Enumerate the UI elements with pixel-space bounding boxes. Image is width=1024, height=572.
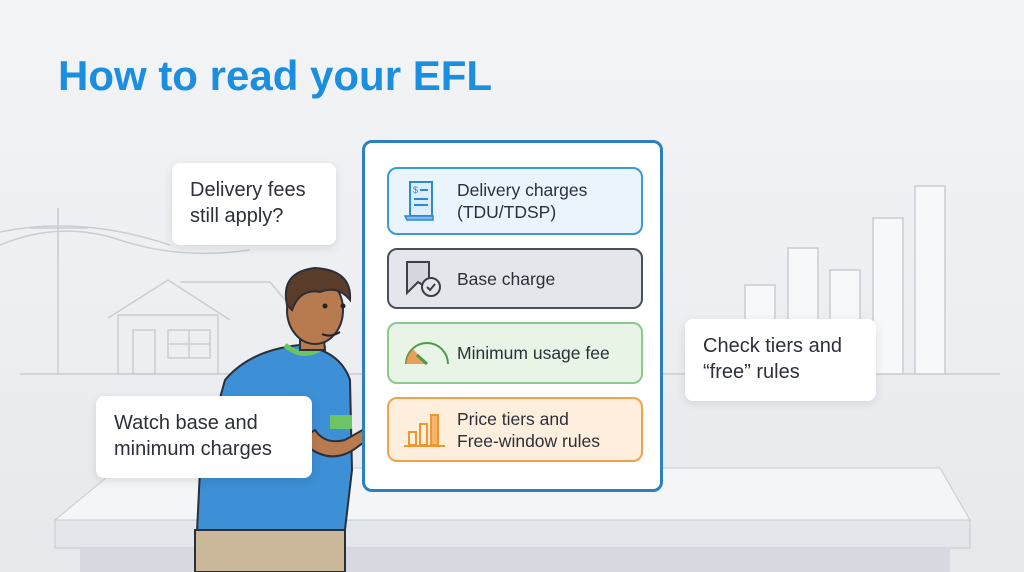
callout: delivery fees: still apply? <box>190 205 283 227</box>
row: delivery charges: Delivery charges <box>457 180 587 200</box>
icon: bill: $ <box>413 185 418 195</box>
callout: watch base <box>96 396 312 478</box>
row: minimum usage fee <box>387 322 643 384</box>
row: base charge: Base charge <box>457 268 555 288</box>
row: delivery charges <box>387 167 643 235</box>
callout: check tiers: Check tiers and <box>703 335 842 357</box>
callout: watch base: Watch base and <box>114 412 258 434</box>
row: delivery charges: (TDU/TDSP) <box>457 202 556 222</box>
row: price tiers: Price tiers and <box>457 408 569 428</box>
row: base charge <box>387 248 643 309</box>
row: minimum usage fee: Minimum usage fee <box>457 343 610 363</box>
callout: delivery fees <box>172 163 336 245</box>
person illustration <box>194 267 362 572</box>
title: How to read your EFL <box>58 52 492 99</box>
row: price tiers <box>387 397 643 462</box>
callout: delivery fees: Delivery fees <box>190 179 306 201</box>
row: price tiers: Free-window rules <box>457 430 600 450</box>
icon: bill <box>404 181 434 221</box>
table <box>55 468 970 520</box>
icon: bar chart <box>404 414 445 447</box>
callout: check tiers <box>685 319 876 401</box>
icon: gauge <box>405 342 449 365</box>
callout: watch base: minimum charges <box>114 438 272 460</box>
icon: tag check <box>406 261 441 297</box>
callout: check tiers: “free” rules <box>703 361 800 383</box>
main EFL card <box>362 140 663 492</box>
